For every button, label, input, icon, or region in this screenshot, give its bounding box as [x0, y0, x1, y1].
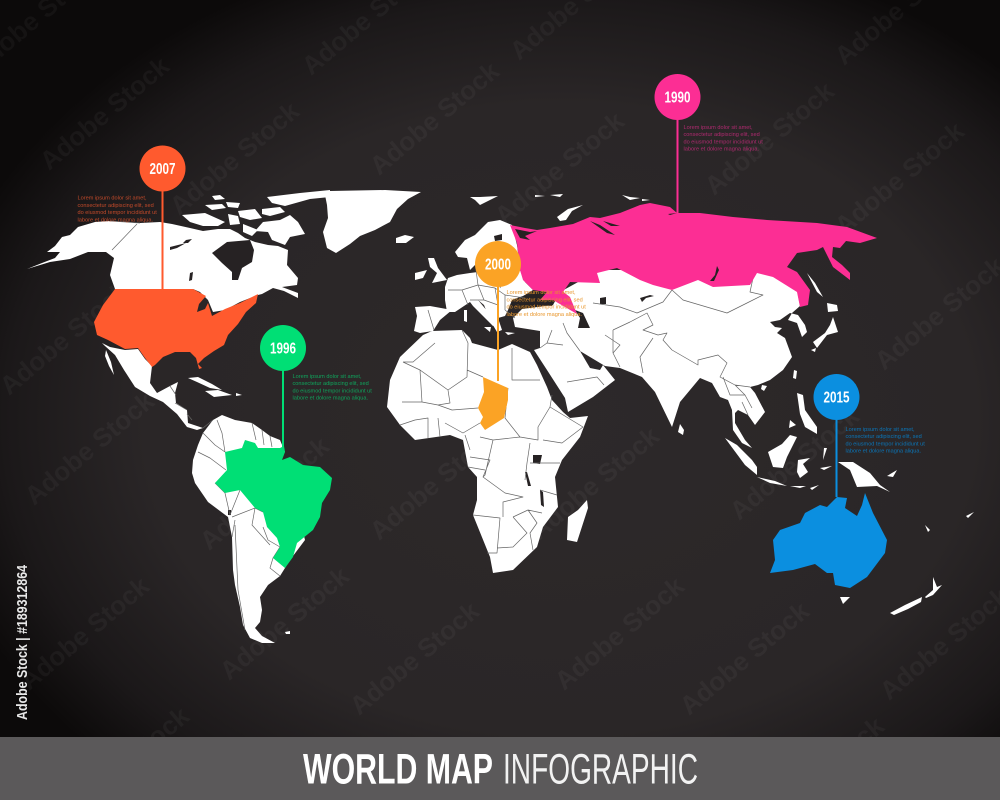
Tasmania [840, 597, 850, 604]
Borneo [768, 435, 797, 468]
Sumatra [725, 438, 757, 475]
pin: 2007 USA [78, 146, 258, 369]
Moluccas [820, 448, 832, 470]
description text: consectetur adipiscing elit, sed [506, 297, 583, 303]
pin: 2000 Chad [475, 241, 586, 430]
description text: labore et dolore magna aliqua. [684, 147, 760, 153]
year marker [475, 241, 521, 287]
connector line [836, 419, 838, 497]
Caribbean islands [188, 377, 242, 397]
description text: do eiusmod tempor incididunt ut [78, 210, 157, 216]
watermark pattern: Adobe Stock [489, 105, 630, 231]
Greenland [323, 190, 421, 253]
Sulawesi [797, 458, 810, 478]
arctic seas on Russia [515, 213, 719, 281]
North America: Alaska and Canada [27, 221, 298, 312]
pin: 1990 Russia [510, 74, 877, 314]
description text: do eiusmod tempor incididunt ut [292, 388, 372, 394]
country: United States [94, 289, 258, 369]
Scandinavia [455, 220, 520, 272]
description text: Lorem ipsum dolor sit amet, [846, 427, 915, 433]
Great Britain [428, 258, 447, 283]
watermark pattern: Adobe Stock [34, 50, 175, 176]
watermark pattern: Adobe Stock [214, 560, 355, 686]
Svalbard and arctic islands [470, 194, 650, 221]
description text: labore et dolore magna aliqua. [506, 312, 583, 318]
description text: labore et dolore magna aliqua. [846, 449, 922, 455]
description text: labore et dolore magna aliqua. [292, 396, 369, 402]
description text: Lorem ipsum dolor sit amet, [292, 374, 362, 380]
Asia [513, 270, 807, 448]
description text: labore et dolore magna aliqua. [78, 217, 154, 223]
connector line [497, 286, 499, 381]
description text: Lorem ipsum dolor sit amet, [78, 196, 147, 202]
description text: do eiusmod tempor incididunt ut [506, 305, 586, 311]
year marker [260, 325, 306, 371]
year marker [814, 374, 860, 420]
title banner [0, 737, 1000, 800]
world map: white continents [27, 190, 974, 643]
year marker [654, 74, 700, 120]
description text: consectetur adipiscing elit, sed [292, 381, 369, 387]
connector line [282, 370, 284, 450]
connector line [162, 190, 164, 289]
pin: 1996 Brazil [215, 325, 372, 568]
pin: 2015 Australia [770, 374, 925, 588]
watermark pattern: Adobe Stock [699, 75, 840, 201]
Sakhalin and Japan [807, 273, 838, 352]
inland seas [228, 234, 654, 515]
Sri Lanka [678, 424, 684, 435]
Falkland [285, 631, 290, 634]
Iceland [396, 235, 414, 243]
description text: consectetur adipiscing elit, sed [78, 203, 154, 209]
description text: consectetur adipiscing elit, sed [684, 132, 760, 138]
year marker [140, 146, 186, 192]
watermark pattern: Adobe Stock [364, 55, 505, 181]
watermark pattern: Adobe Stock [164, 95, 305, 221]
year marker: 1990 [664, 90, 691, 106]
watermark pattern: Adobe Stock [549, 570, 690, 696]
Hudson Bay [212, 240, 254, 280]
Ireland [415, 270, 427, 280]
highlighted countries and pins [78, 74, 925, 588]
Arctic islands of Canada [182, 190, 330, 245]
country: Russia [510, 203, 877, 314]
New Guinea [838, 462, 907, 492]
Mexico and Central America [102, 343, 203, 430]
Mediterranean islands [464, 310, 515, 335]
title: Infographic: INFOGRAPHIC [503, 746, 698, 794]
year marker: 2015 [824, 390, 850, 406]
South America [192, 415, 305, 643]
description text: do eiusmod tempor incididunt ut [846, 441, 925, 447]
Africa [387, 330, 588, 573]
country: Australia [770, 493, 887, 588]
description text: do eiusmod tempor incididunt ut [684, 139, 763, 145]
year marker: 2007 [150, 161, 176, 178]
New Zealand [890, 577, 942, 615]
watermark pattern: Adobe Stock [524, 420, 665, 546]
watermark pattern: Adobe Stock [194, 430, 335, 556]
country borders [110, 221, 763, 630]
description text: consectetur adipiscing elit, sed [846, 434, 922, 440]
watermark pattern: Adobe Stock [14, 570, 155, 696]
country: Brazil [215, 440, 332, 568]
description text: Lorem ipsum dolor sit amet, [684, 125, 753, 131]
Canadian lakes [170, 239, 193, 281]
watermark pattern: Adobe Stock [364, 420, 505, 546]
description text: Lorem ipsum dolor sit amet, [506, 290, 576, 296]
year marker: 2000 [485, 256, 511, 274]
Java and lesser Sunda [757, 477, 819, 490]
Continental Europe [445, 270, 533, 332]
stock credit: Adobe Stock | #189312864 [14, 564, 31, 720]
watermark pattern: Adobe Stock [674, 595, 815, 721]
watermark pattern: Adobe Stock [724, 400, 865, 526]
title: World Map: WORLD MAP [303, 746, 493, 794]
New Caledonia and Fiji [925, 512, 974, 532]
country: Chad [478, 377, 508, 430]
Hainan and Taiwan [761, 370, 797, 391]
watermark pattern: Adobe Stock [19, 385, 160, 511]
watermark pattern: Adobe Stock [344, 595, 485, 721]
Iberian Peninsula [414, 306, 452, 333]
Philippines [789, 393, 817, 434]
Madagascar [567, 500, 588, 542]
watermark pattern: Adobe Stock [829, 115, 970, 241]
connector line [676, 119, 678, 213]
year marker: 1996 [270, 340, 296, 358]
